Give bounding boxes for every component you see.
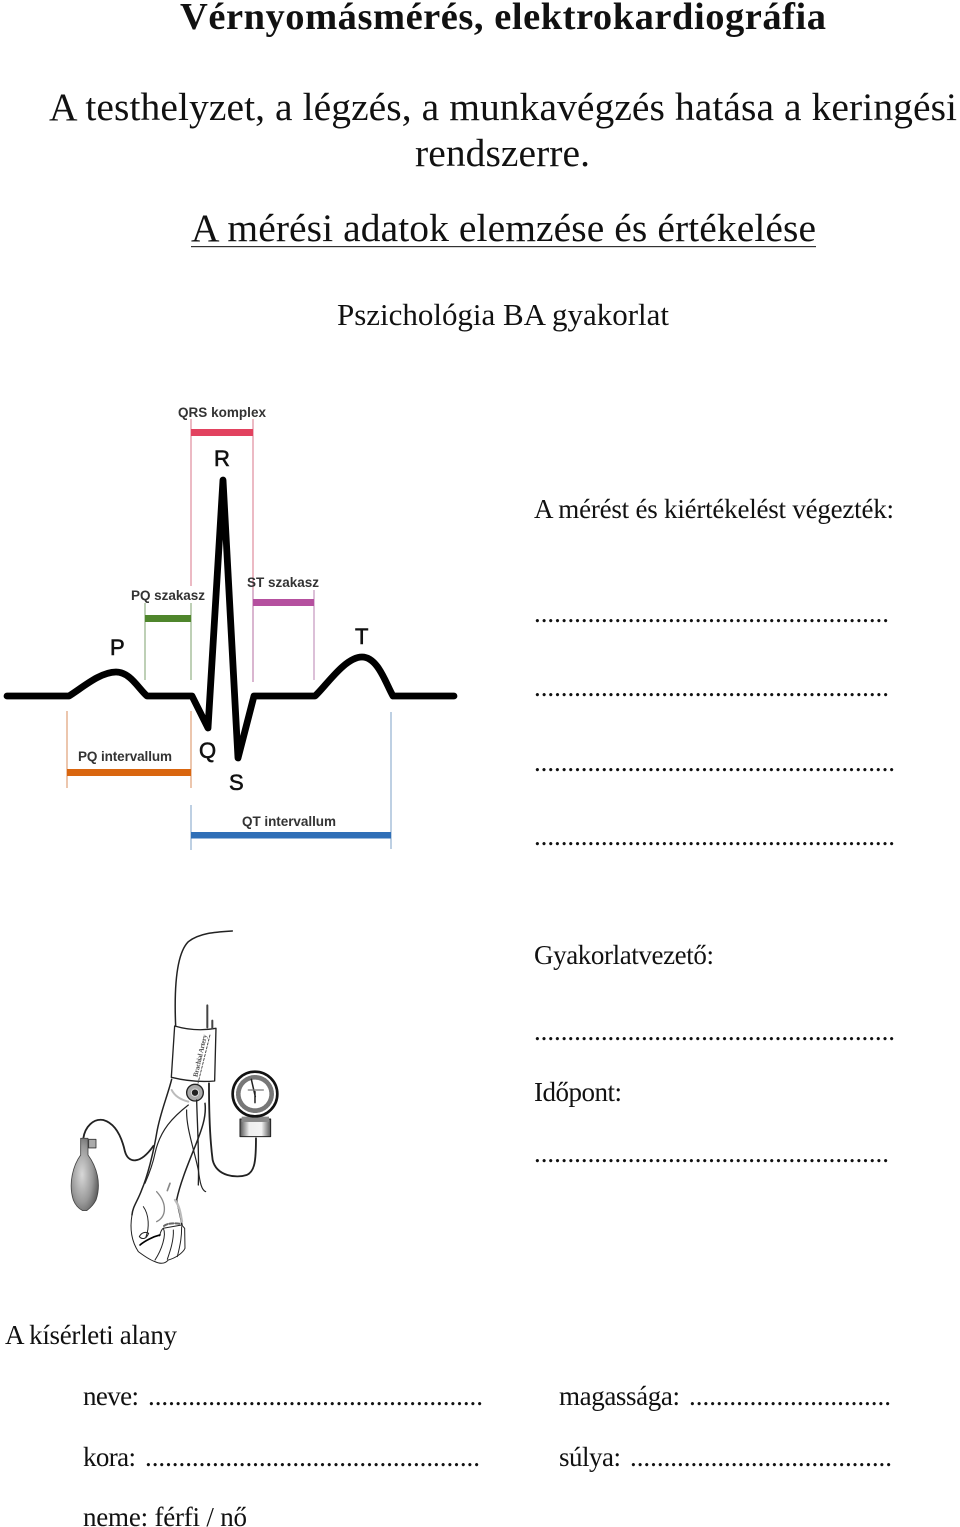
block: measurement performed by: .....................................................: [534, 598, 889, 628]
block: instructor: Gyakorlatvezető:: [534, 940, 714, 970]
pressure gauge: [233, 1072, 277, 1137]
field: age: kora:: [83, 1442, 136, 1472]
wave letters: Q: [199, 738, 216, 763]
block: date: Időpont:: [534, 1077, 622, 1107]
wave letters: R: [214, 446, 230, 471]
chart: ECG waveform diagram: [7, 405, 454, 850]
QRS complex marker: [178, 405, 266, 682]
subtitle: A testhelyzet, a légzés, a munkavégzés hatása a keringési: [49, 85, 957, 129]
heading: subject: A kísérleti alany: [5, 1320, 178, 1350]
PQ interval marker: [67, 711, 191, 788]
block: instructor: ......................................................: [534, 1016, 895, 1046]
ST segment marker: [247, 575, 319, 682]
subtitle: [49, 85, 957, 175]
gauge tube: [209, 1083, 256, 1176]
dots: weight: .......................................: [630, 1442, 892, 1472]
block: measurement performed by: ......................................................: [534, 821, 895, 851]
ST segment marker: ST szakasz: [247, 575, 319, 590]
stethoscope head and tubes: [145, 1084, 206, 1192]
subtitle: rendszerre.: [415, 131, 590, 175]
inflation bulb: [71, 1138, 98, 1211]
cuff with artery label: [171, 1005, 216, 1083]
PQ segment marker: [131, 588, 205, 680]
field: name: neve:: [83, 1381, 139, 1411]
wave letters: T: [355, 624, 368, 649]
dots: height: ..............................: [689, 1381, 891, 1411]
wave letters: P: [110, 635, 125, 660]
wave letters: [110, 446, 368, 795]
QRS complex marker: QRS komplex: [178, 405, 266, 420]
wave letters: S: [229, 770, 244, 795]
PQ interval marker: PQ intervallum: [78, 749, 172, 764]
illustration: blood pressure measurement on arm: [71, 931, 277, 1263]
block: measurement performed by: ......................................................: [534, 747, 895, 777]
dots: age: ..................................................: [145, 1442, 480, 1472]
arm outline: [131, 931, 232, 1263]
cuff with artery label: Brachial Artery: [191, 1033, 209, 1078]
QT interval marker: [191, 712, 391, 850]
field: weight: súlya:: [559, 1442, 621, 1472]
block: measurement performed by: .....................................................: [534, 672, 889, 702]
block: date: [534, 1077, 889, 1168]
QT interval marker: QT intervallum: [242, 814, 336, 829]
block: measurement performed by: [534, 494, 895, 851]
field: height: magassága:: [559, 1381, 680, 1411]
block: instructor: [534, 940, 895, 1046]
block: test subject: [5, 1320, 892, 1527]
PQ segment marker: PQ szakasz: [131, 588, 205, 603]
dots: name: ..................................................: [148, 1381, 483, 1411]
block: measurement performed by: A mérést és kiértékelést végezték:: [534, 494, 894, 524]
heading: underlined: A mérési adatok elemzése és értékelése: [191, 206, 816, 250]
inflation tube: [83, 1120, 153, 1160]
ECG trace line: [7, 480, 454, 758]
block: date: .....................................................: [534, 1138, 889, 1168]
course label: Pszichológia BA gyakorlat: [337, 297, 669, 332]
